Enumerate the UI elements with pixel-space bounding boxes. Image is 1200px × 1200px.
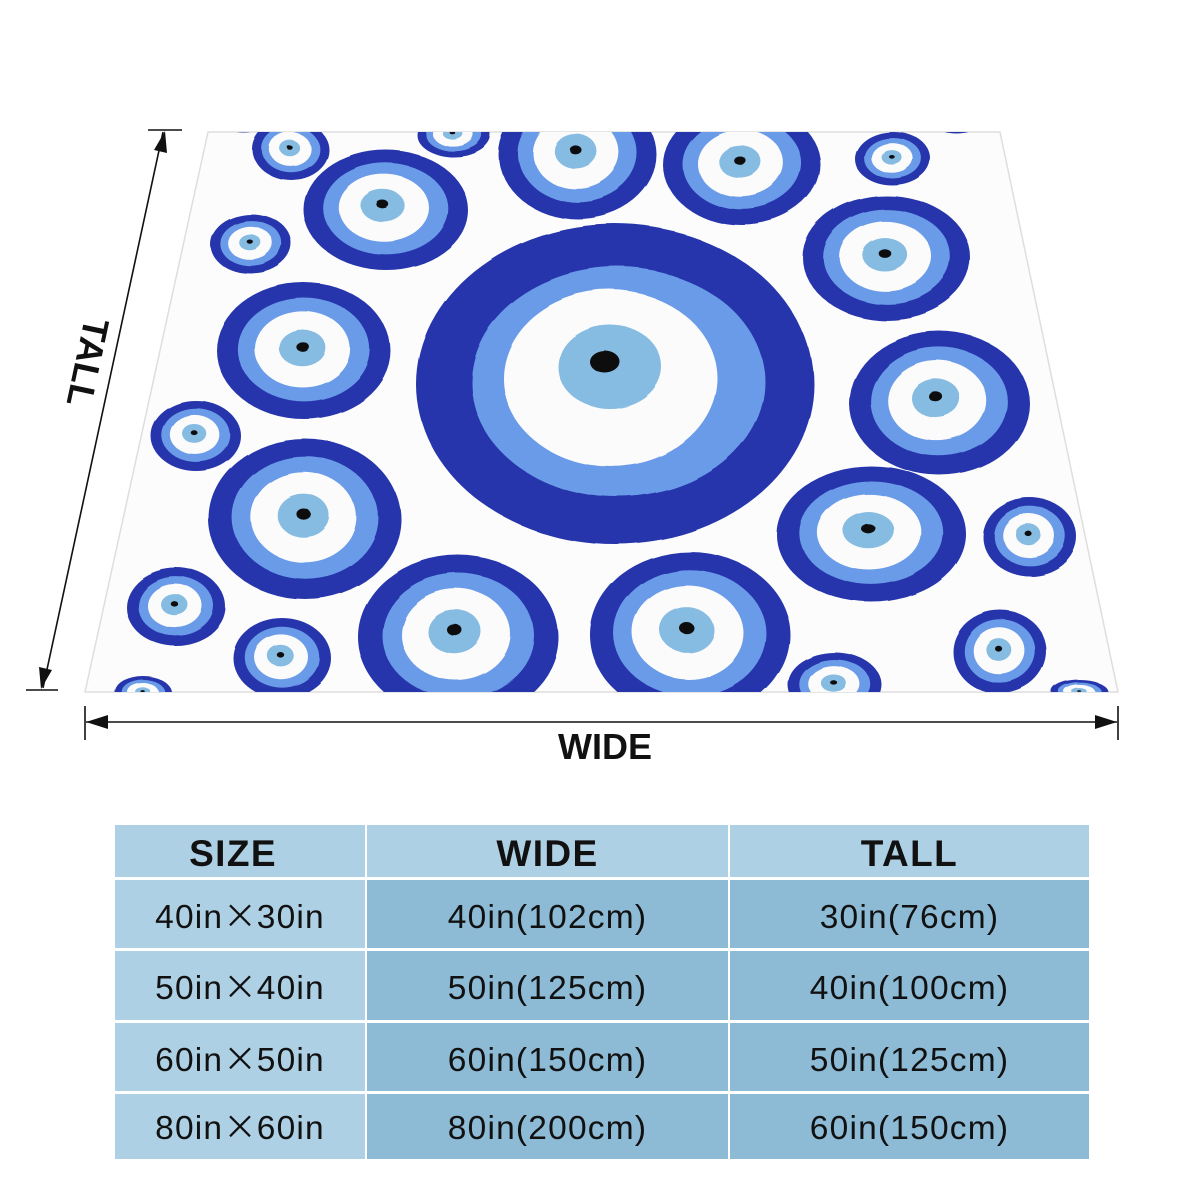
row 1 size	[115, 880, 365, 948]
row 1 tall	[730, 880, 1089, 948]
label: tall: TALL	[59, 315, 117, 411]
row 3 wide: 60in(150cm)	[448, 1042, 647, 1078]
small eyes	[114, 132, 1108, 692]
header: size: SIZE	[189, 833, 277, 874]
eye: central large	[416, 224, 814, 544]
row 2 wide: 50in(125cm)	[448, 970, 647, 1007]
arrow: tall dimension	[26, 130, 182, 690]
header: tall: TALL	[861, 833, 958, 874]
row 1 wide	[367, 880, 728, 948]
diagram: blanket with dimension arrows	[26, 129, 1119, 759]
row 3 tall	[730, 1023, 1089, 1091]
header: wide	[367, 825, 728, 877]
row 2 wide	[367, 951, 728, 1020]
row 2 size	[115, 951, 365, 1020]
row 4 size: 80in×60in	[155, 1100, 325, 1148]
row 3 wide	[367, 1023, 728, 1091]
row 2 size: 50in×40in	[155, 960, 325, 1009]
row 1 tall: 30in(76cm)	[820, 898, 999, 936]
row 3 size	[115, 1023, 365, 1091]
row 4 wide: 80in(200cm)	[448, 1110, 647, 1146]
row 3 size: 60in×50in	[155, 1032, 325, 1080]
size table	[115, 825, 1089, 1159]
row 4 tall: 60in(150cm)	[810, 1110, 1009, 1146]
row 4 tall	[730, 1094, 1089, 1159]
header: tall	[730, 825, 1089, 877]
arrow: wide dimension	[85, 706, 1118, 740]
row 4 wide	[367, 1094, 728, 1159]
header: wide: WIDE	[496, 833, 599, 874]
header: size	[115, 825, 365, 877]
row 1 size: 40in×30in	[155, 888, 325, 938]
label: wide: WIDE	[558, 726, 652, 767]
row 3 tall: 50in(125cm)	[810, 1042, 1009, 1078]
row 2 tall	[730, 951, 1089, 1020]
infographic page	[26, 129, 1119, 1159]
blanket	[84, 131, 1119, 693]
row 4 size	[115, 1094, 365, 1159]
row 2 tall: 40in(100cm)	[810, 970, 1009, 1007]
row 1 wide: 40in(102cm)	[448, 898, 647, 936]
